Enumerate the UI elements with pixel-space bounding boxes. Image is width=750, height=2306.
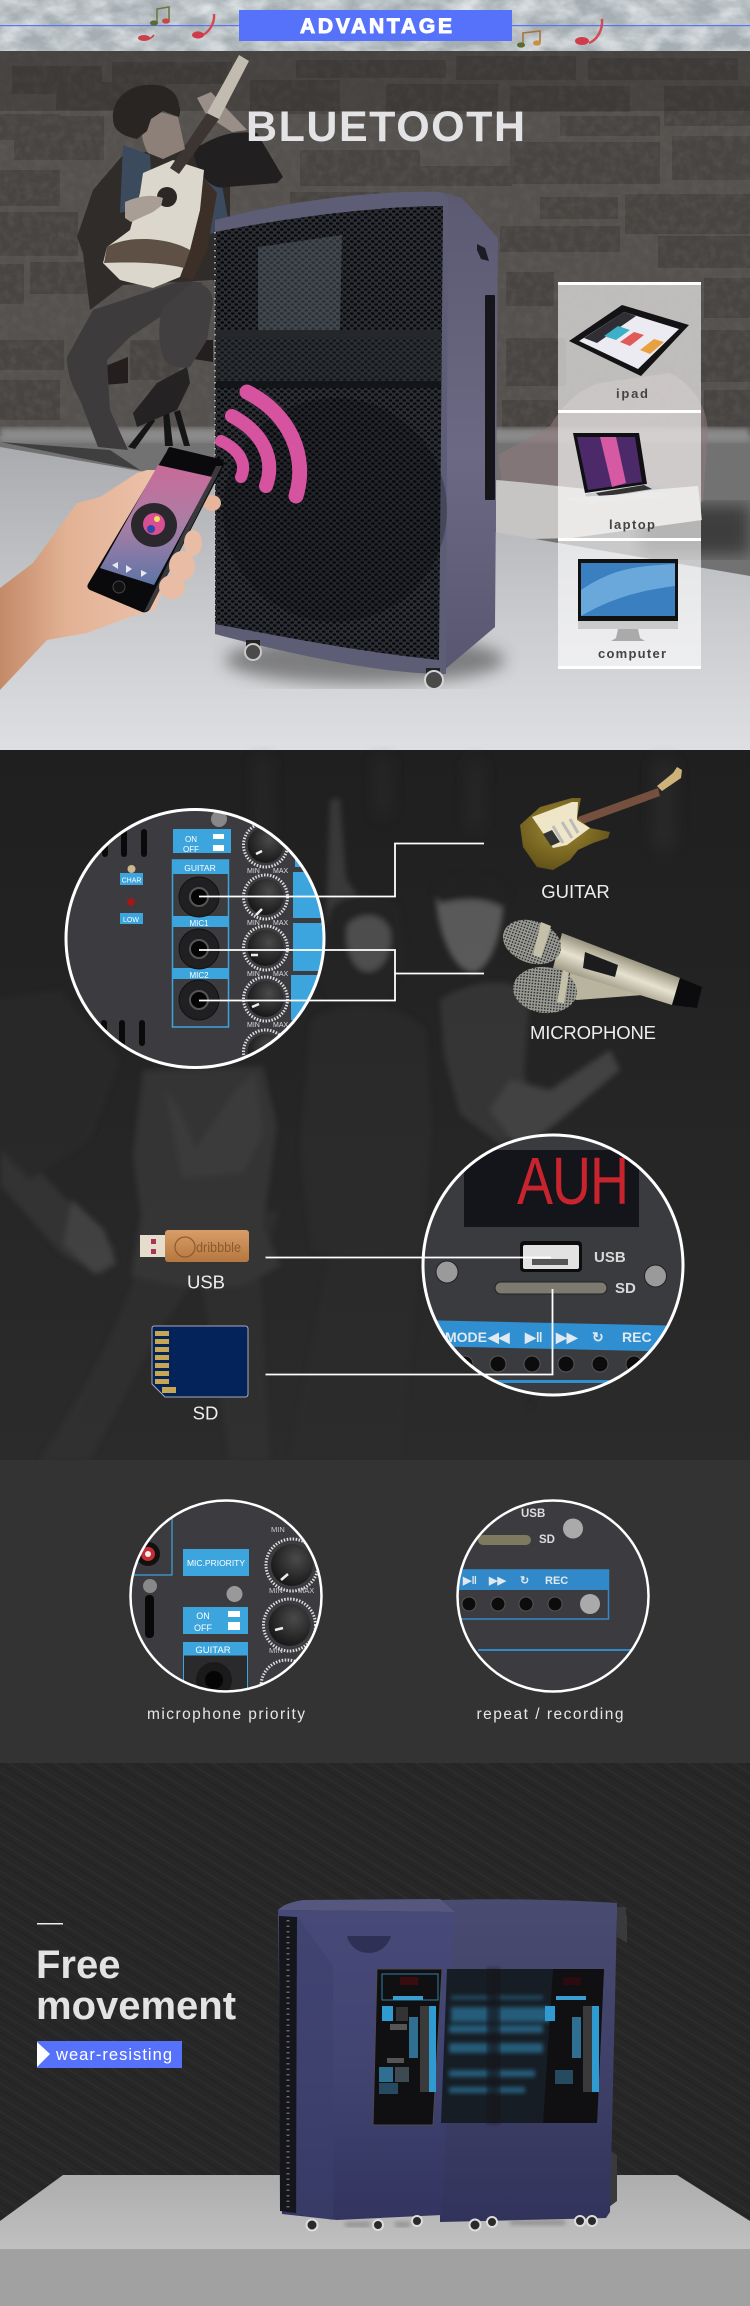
guitar neck <box>578 788 660 825</box>
on off label: OFF <box>194 1623 212 1633</box>
front control panel <box>373 1969 442 2125</box>
rear control panel <box>543 1969 604 2123</box>
guitar neck <box>170 113 219 174</box>
panel: bluetooth section <box>0 51 750 750</box>
illustration: guitarist <box>67 55 283 450</box>
motion smear <box>345 2220 565 2227</box>
tag: wear-resisting <box>37 2041 182 2068</box>
speaker handle <box>477 244 489 261</box>
knobs: MIN <box>269 1586 283 1595</box>
title: bluetooth: BLUETOOTH <box>246 103 525 151</box>
label: sd: SD <box>193 1402 218 1424</box>
panel labels: SD <box>615 1280 636 1297</box>
background: concert photo <box>0 750 750 1461</box>
sd slot <box>495 1282 607 1294</box>
on off switch label <box>173 829 231 854</box>
control band: ▶▶ <box>555 1329 579 1345</box>
speaker cabinet top <box>215 192 448 674</box>
knobs <box>261 1525 318 1712</box>
label: repeat recording: repeat / recording <box>476 1706 624 1723</box>
label: usb: USB <box>187 1272 225 1292</box>
on off switch label: ON <box>185 835 197 844</box>
control band <box>420 1320 690 1383</box>
guitar jack <box>183 1642 248 1700</box>
upper grille <box>497 912 567 972</box>
background: brick wall <box>0 51 750 586</box>
callout: repeat recording close-up: USB <box>521 1508 545 1520</box>
background: floor <box>0 447 750 750</box>
illustration: smartphone <box>87 447 224 612</box>
guitarist scarf <box>120 145 230 235</box>
rear mic body <box>565 973 643 1000</box>
front speaker grille edge <box>279 1916 297 2213</box>
mic priority switch label: MIC.PRIORITY <box>187 1558 245 1568</box>
control band: ▶‖ <box>524 1329 543 1345</box>
panel labels <box>594 1249 636 1297</box>
led display: AUH <box>517 1144 629 1218</box>
charge and low indicators <box>120 865 143 924</box>
label: microphone: MICROPHONE <box>530 1022 656 1043</box>
label: laptop: laptop <box>609 517 655 532</box>
caster wheels <box>306 2216 597 2230</box>
guitar body <box>103 160 204 288</box>
speaker base trim <box>215 626 445 674</box>
level knobs: MAX <box>273 1022 288 1029</box>
level knobs: MIN <box>247 1022 260 1029</box>
control band: REC <box>545 1575 568 1587</box>
knobs: MIN <box>269 1646 283 1655</box>
icon: sd card <box>152 1326 248 1397</box>
front speaker body <box>278 1910 455 2220</box>
guitar body <box>520 798 610 870</box>
tag: wear-resisting: wear-resisting <box>55 2046 172 2064</box>
guitarist jacket tails <box>103 340 213 385</box>
callout: repeat recording close-up <box>455 1495 655 1700</box>
guitarist boot <box>133 367 190 427</box>
guitarist hand on guitar <box>125 196 163 222</box>
phone disc <box>131 503 177 547</box>
icon: usb stick: dribbble <box>196 1239 241 1255</box>
mic priority switch label <box>183 1549 249 1576</box>
usb port <box>520 1241 582 1272</box>
icon: usb stick <box>140 1230 249 1262</box>
callout: repeat recording close-up: SD <box>539 1534 555 1546</box>
guitarist hair <box>113 85 180 139</box>
control band: ▶‖ <box>462 1575 477 1587</box>
guitar headstock <box>657 767 682 791</box>
motion blurred panel <box>441 1969 604 2123</box>
side blue labels <box>291 815 325 1020</box>
guitarist jacket <box>77 145 230 310</box>
label: guitar: GUITAR <box>541 881 610 902</box>
level knobs <box>244 823 288 1074</box>
side handle <box>347 1936 391 1953</box>
panel: free movement section <box>0 1763 750 2306</box>
speaker horn <box>258 235 342 330</box>
charge and low indicators: LOW <box>123 917 139 924</box>
control band: MODE <box>445 1329 487 1345</box>
level knobs: MIN <box>247 971 260 978</box>
guitar and mic jacks: MIC1 <box>189 919 209 928</box>
charge and low indicators: CHAR <box>122 878 141 884</box>
guitar body side <box>180 177 217 280</box>
level knobs: MIN <box>247 868 260 875</box>
callout: usb and sd close-up <box>420 1130 690 1400</box>
illustration: moving speaker <box>278 1899 627 2230</box>
section: header strip <box>0 0 750 51</box>
level knobs: MAX <box>273 868 288 875</box>
speaker side panel <box>440 192 498 671</box>
speaker woofer <box>223 398 447 622</box>
illustration: speaker shadow <box>225 636 505 684</box>
knobs: MIN <box>271 1525 285 1534</box>
rear blocks <box>605 1907 627 2210</box>
divider mark <box>37 1923 63 1924</box>
on off label <box>183 1607 248 1634</box>
control band: ◀◀ <box>487 1329 510 1345</box>
guitarist raised arm <box>193 132 283 188</box>
lower grille <box>511 964 579 1016</box>
level knobs: MIN <box>247 920 260 927</box>
speaker band <box>215 329 441 380</box>
illustration: guitar case <box>496 373 708 540</box>
control band: ▶▶ <box>488 1575 506 1587</box>
front speaker top <box>278 1899 455 1912</box>
stage floor <box>0 2175 750 2306</box>
device: ipad <box>569 305 689 376</box>
heading bar <box>239 10 512 41</box>
control band: REC <box>622 1329 652 1345</box>
guitar and mic jacks: MIC2 <box>189 971 209 980</box>
vents <box>101 829 147 1046</box>
guitarist stool <box>128 410 190 449</box>
panel: functions section <box>0 1460 750 1763</box>
speaker control strip <box>485 295 495 500</box>
callout: microphone priority close-up <box>125 1495 330 1712</box>
on off switch label: OFF <box>183 845 199 854</box>
motion speaker body <box>440 1899 617 2222</box>
heading bar: ADVANTAGE <box>300 15 452 38</box>
level knobs: MAX <box>273 920 288 927</box>
front mic body <box>553 933 680 1005</box>
speaker mesh <box>215 206 443 660</box>
guitar and mic jacks <box>172 860 229 1027</box>
control band <box>455 1570 608 1619</box>
panel: inputs section <box>0 750 750 1461</box>
guitarist forearm <box>197 92 247 132</box>
label: ipad: ipad <box>616 386 648 401</box>
connector lines <box>199 844 552 1374</box>
icon: microphones <box>497 912 702 1016</box>
guitar and mic jacks: GUITAR <box>184 863 216 873</box>
knobs: MAX <box>298 1586 314 1595</box>
heading: free movement: Free <box>36 1943 120 1987</box>
on off label: ON <box>196 1611 210 1621</box>
speaker wheels <box>245 640 443 689</box>
panel: connectable devices <box>558 282 701 669</box>
illustration: speaker <box>215 192 498 689</box>
control band: ↻ <box>592 1329 604 1345</box>
led display <box>464 1144 639 1227</box>
phone controls <box>112 562 147 577</box>
mic switch <box>583 952 618 977</box>
label: microphone priority: microphone priority <box>147 1706 305 1723</box>
screws <box>436 1261 666 1287</box>
guitarist head <box>142 112 185 159</box>
icon: electric guitar <box>520 767 682 870</box>
icon: bluetooth waves <box>221 392 300 496</box>
mic tip <box>672 978 702 1008</box>
callout: input jacks close-up <box>60 805 330 1075</box>
icon: music notes <box>138 7 602 48</box>
illustration: hand <box>0 470 170 690</box>
illustration: fingers <box>159 530 202 599</box>
guitar pickguard <box>532 802 590 848</box>
guitar jack: GUITAR <box>195 1645 231 1656</box>
front speaker facet <box>297 1916 333 2220</box>
heading: free movement: movement <box>36 1984 236 2028</box>
panel labels: USB <box>594 1249 626 1266</box>
device: computer <box>578 559 678 641</box>
guitarist right leg <box>159 282 213 368</box>
illustration: rear finger <box>203 495 221 511</box>
level knobs: MAX <box>273 971 288 978</box>
label: computer: computer <box>598 646 666 661</box>
device: laptop <box>562 433 672 504</box>
control band: ↻ <box>520 1575 529 1587</box>
heading: free movement <box>36 1943 236 2028</box>
guitarist left leg <box>67 280 203 450</box>
